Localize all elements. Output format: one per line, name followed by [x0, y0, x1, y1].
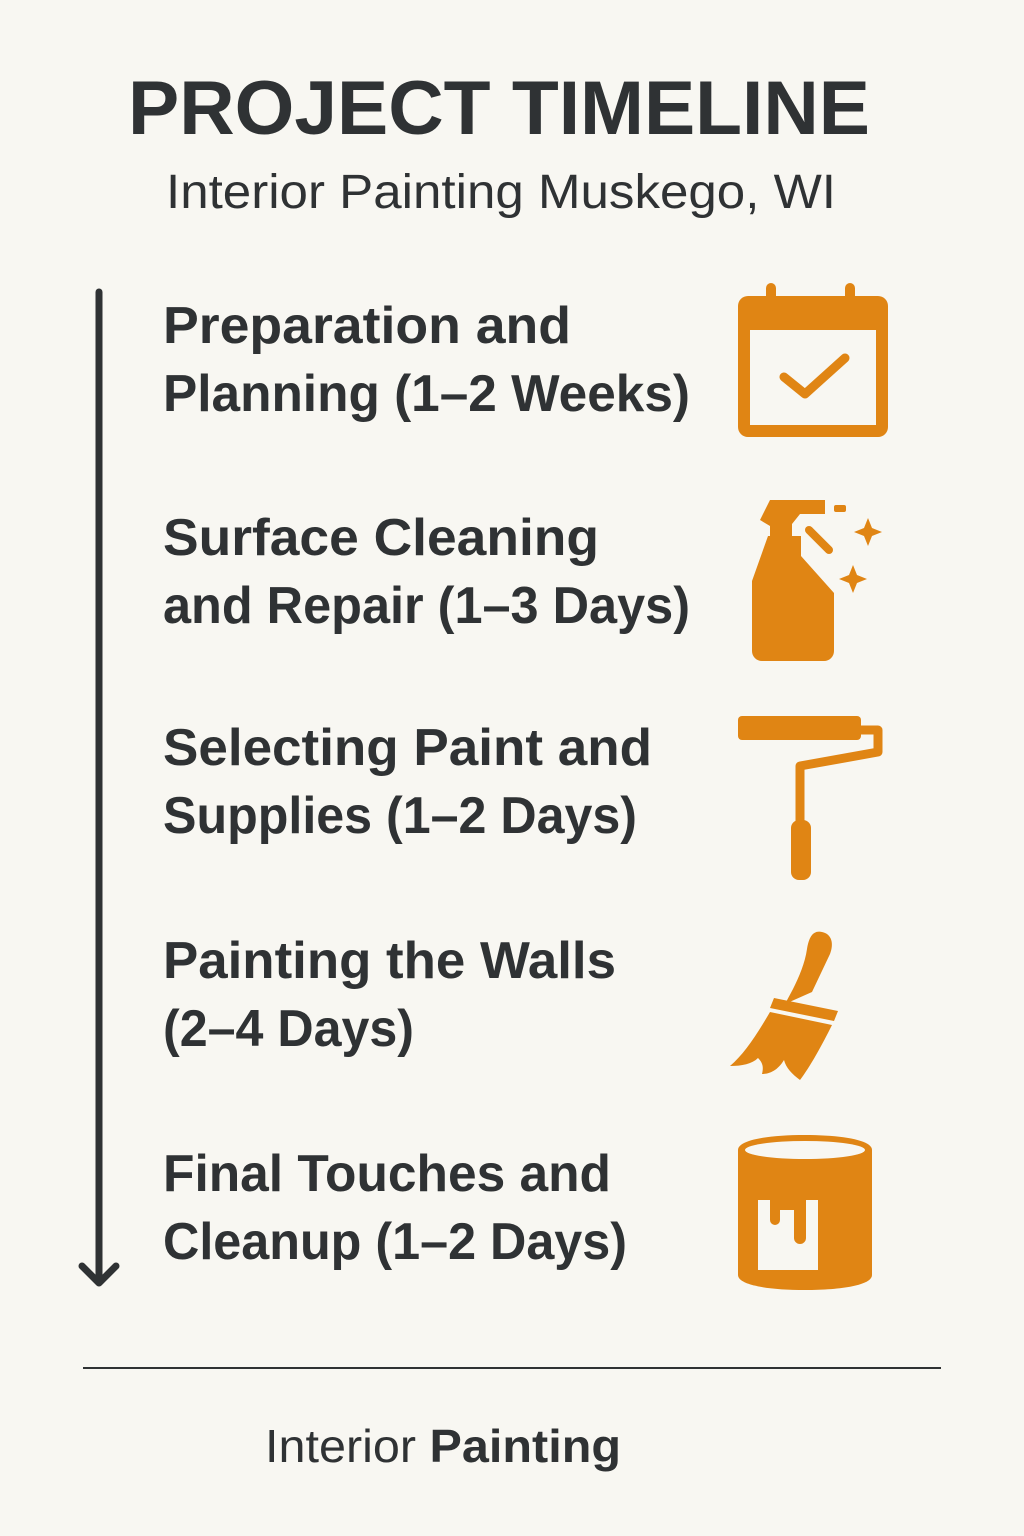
step 1 text: Planning (1–2 Weeks) [163, 365, 690, 423]
step 4 text: Painting the Walls [163, 932, 616, 990]
step 2 text: and Repair (1–3 Days) [163, 577, 690, 635]
icon: paint can [738, 1135, 872, 1290]
step 2 text [163, 509, 690, 635]
step 5 text: Final Touches and [163, 1145, 611, 1203]
subtitle: Interior Painting Muskego, WI [166, 166, 836, 219]
step 5 text [163, 1145, 627, 1271]
step 1 text [163, 297, 690, 423]
footer: Interior Painting [265, 1420, 621, 1472]
step 5 text: Cleanup (1–2 Days) [163, 1213, 627, 1271]
icon: paint roller [738, 716, 878, 880]
icon: paint brush [730, 932, 838, 1080]
arrow: timeline [82, 292, 116, 1283]
divider [83, 1367, 941, 1369]
step 2 text: Surface Cleaning [163, 509, 599, 567]
step 4 text [163, 932, 616, 1058]
title: PROJECT TIMELINE [128, 66, 870, 151]
step 3 text: Selecting Paint and [163, 719, 652, 777]
icon: calendar [738, 283, 888, 437]
icon: spray bottle [752, 500, 882, 661]
step 4 text: (2–4 Days) [163, 1000, 414, 1058]
step 1 text: Preparation and [163, 297, 571, 355]
step 3 text [163, 719, 652, 845]
step 3 text: Supplies (1–2 Days) [163, 787, 637, 845]
